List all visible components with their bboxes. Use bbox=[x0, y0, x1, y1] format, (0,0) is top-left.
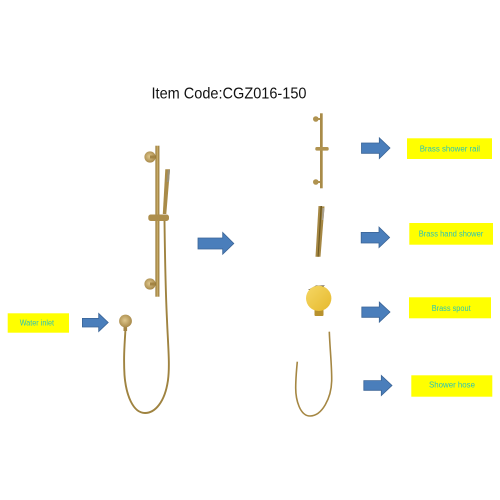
label: brass hand shower: Brass hand shower bbox=[419, 229, 484, 238]
arrow: spout bbox=[362, 302, 390, 322]
label: brass hand shower bbox=[409, 223, 493, 245]
slider bbox=[148, 214, 169, 221]
arrow: water inlet bbox=[82, 313, 108, 332]
part: hand shower bbox=[316, 206, 324, 257]
arrow: shower rail bbox=[362, 138, 390, 159]
title: Item Code:CGZ016-150 bbox=[152, 86, 307, 102]
label: brass spout: Brass spout bbox=[432, 304, 471, 313]
label: brass shower rail bbox=[407, 138, 492, 159]
hose bbox=[124, 221, 169, 413]
part: shower rail bbox=[313, 113, 329, 188]
label: water inlet: Water inlet bbox=[20, 318, 55, 327]
label: shower hose: Shower hose bbox=[429, 380, 476, 389]
arrow: hose bbox=[364, 375, 392, 396]
spout bbox=[119, 315, 132, 331]
label: shower hose bbox=[411, 375, 492, 397]
slide rail bbox=[155, 146, 159, 297]
assembled shower set bbox=[119, 146, 170, 413]
hand shower bbox=[163, 169, 170, 214]
label: water inlet bbox=[8, 313, 69, 333]
rail brackets bbox=[144, 151, 156, 290]
central arrow bbox=[198, 232, 234, 254]
part: brass spout bbox=[306, 286, 331, 316]
part: shower hose bbox=[296, 332, 332, 416]
label: brass spout bbox=[409, 297, 491, 318]
label: brass shower rail: Brass shower rail bbox=[420, 144, 480, 153]
arrow: hand shower bbox=[361, 227, 390, 248]
